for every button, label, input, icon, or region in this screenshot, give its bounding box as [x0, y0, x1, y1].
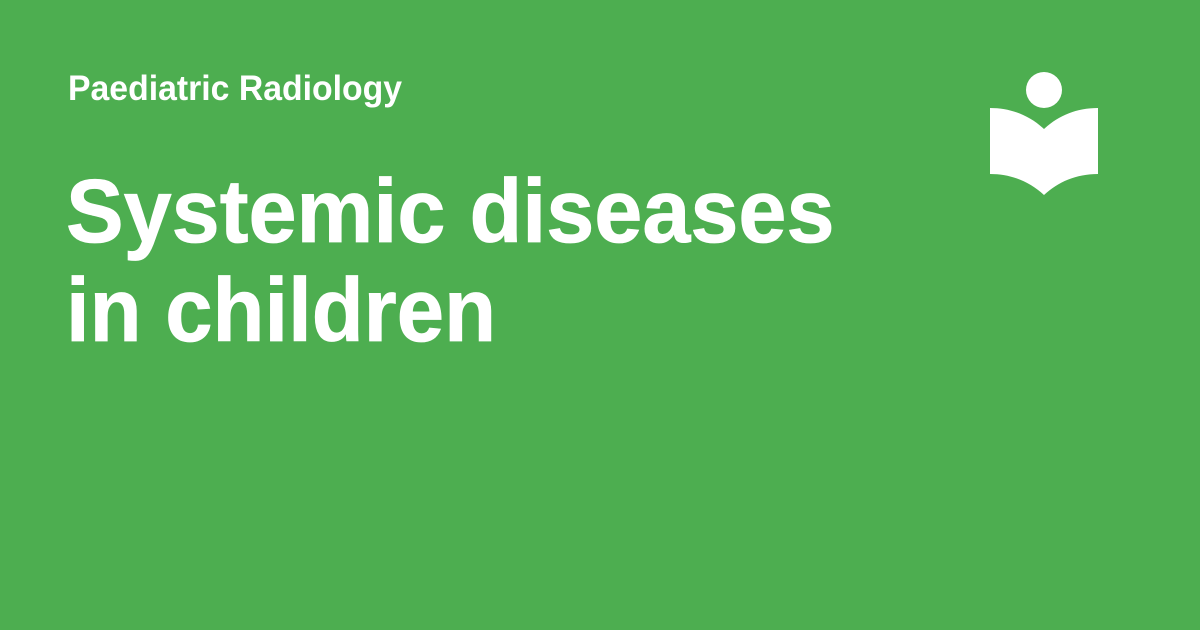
title: in children: [66, 261, 496, 361]
icon: person reading book: [990, 72, 1098, 195]
title: Systemic diseases: [66, 162, 835, 262]
title: [66, 162, 835, 361]
subtitle: category: Paediatric Radiology: [68, 69, 402, 108]
